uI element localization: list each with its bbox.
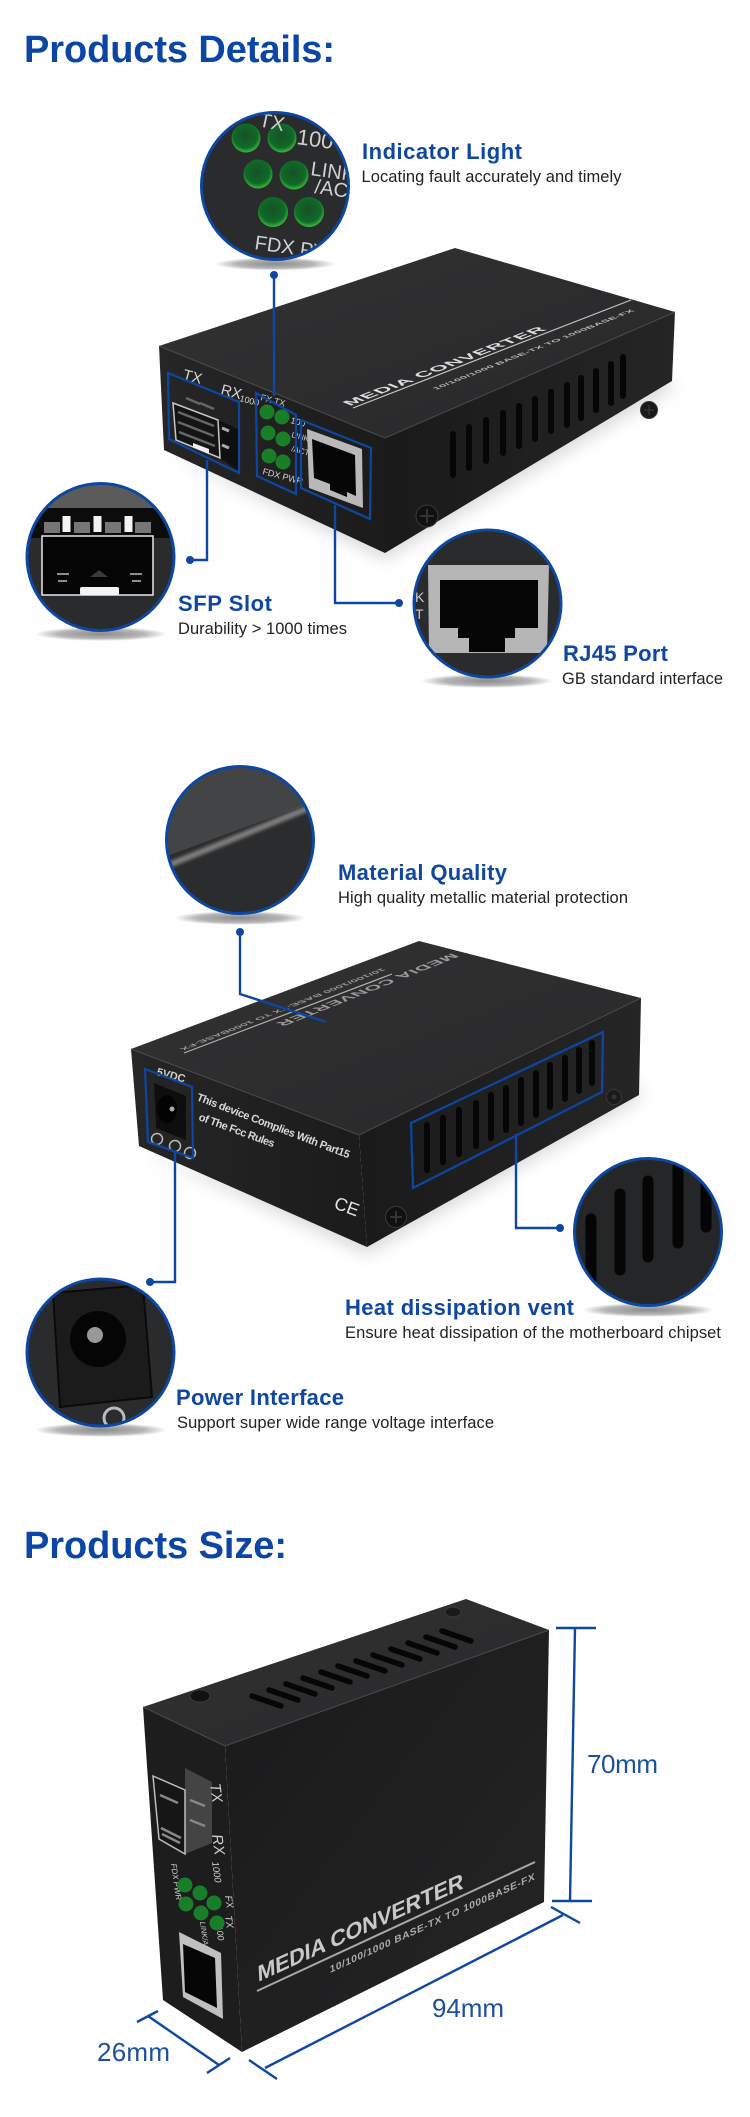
- connector: [186, 460, 207, 564]
- lens shadow: [215, 258, 335, 270]
- RJ45 port: [179, 1932, 223, 2019]
- side labels: 1000: [209, 1861, 223, 1884]
- device 2 screws: [386, 1090, 622, 1228]
- front labels: [181, 366, 311, 487]
- lens shadow: [421, 674, 553, 688]
- power jack and label: [152, 1066, 196, 1158]
- panel: top device view: [159, 248, 675, 560]
- dimension: 70mm: 70mm: [587, 1749, 658, 1779]
- side labels: LINK/ACT: [198, 1921, 212, 1957]
- device 2 product name (upside down): MEDIA CONVERTER: [272, 952, 461, 1027]
- LEDs: [260, 404, 290, 470]
- device 2 body: [131, 941, 641, 1255]
- front labels: LINK: [290, 430, 311, 444]
- dimension: 94mm: 94mm: [432, 1993, 504, 2023]
- highlight boxes: [168, 373, 371, 519]
- device 3 product name: 10/100/1000 BASE-TX TO 1000BASE-FX: [330, 1872, 535, 1976]
- front labels: 100: [289, 415, 307, 429]
- SFP port: [153, 1768, 212, 1854]
- heading: Power Interface: [176, 1385, 344, 1410]
- device 3 screws: [190, 1607, 461, 1702]
- lens shadow: [35, 627, 167, 641]
- description: Durability > 1000 times: [178, 620, 347, 638]
- front labels: FX TX: [259, 392, 287, 408]
- side labels: 100: [214, 1925, 226, 1941]
- connector: [236, 928, 326, 1022]
- device 1 product name: [338, 300, 636, 408]
- heading: RJ45 Port: [563, 641, 669, 666]
- dimension: 26mm: [97, 2011, 230, 2073]
- description: Support super wide range voltage interface: [177, 1414, 494, 1432]
- heading: Indicator Light: [362, 139, 523, 164]
- device 3 vent slots: [252, 1631, 471, 1706]
- callout: RJ45 port: [335, 505, 723, 688]
- lens: vent: [575, 1159, 721, 1305]
- SFP port: [173, 398, 240, 472]
- side labels: TX: [222, 1915, 235, 1929]
- callout: indicator light: [202, 109, 622, 396]
- heading: SFP Slot: [178, 591, 273, 616]
- lens: LEDs: [203, 114, 347, 258]
- description: GB standard interface: [562, 670, 723, 688]
- device 3 body: [143, 1599, 549, 2052]
- connector: [270, 271, 278, 396]
- compliance text: of The Fcc Rules: [197, 1112, 276, 1150]
- callout: heat dissipation vent: [345, 1134, 722, 1342]
- dimension: 94mm: [249, 1907, 580, 2079]
- device 2 product name (upside down): 10/100/1000 BASE-TX TO 1000BASE-FX: [176, 967, 387, 1051]
- device 1 product name: MEDIA CONVERTER: [338, 325, 551, 407]
- lens: LEDs: TX: [257, 109, 287, 136]
- device 3 product name: [257, 1862, 535, 1991]
- compliance text: This device Complies With Part15: [195, 1092, 351, 1161]
- device 3 product name: MEDIA CONVERTER: [257, 1868, 464, 1987]
- panel: size view: [97, 1599, 658, 2079]
- callout: material quality: [159, 760, 628, 1022]
- side labels: RX: [208, 1833, 228, 1857]
- side labels: [169, 1782, 235, 1957]
- side labels: TX: [206, 1782, 226, 1805]
- description: High quality metallic material protection: [338, 889, 628, 907]
- side labels: FX: [222, 1895, 235, 1909]
- dimension: 70mm: [552, 1628, 658, 1901]
- front labels: RX: [219, 381, 243, 403]
- lens: LEDs: LINK: [309, 158, 357, 186]
- description: Locating fault accurately and timely: [362, 168, 622, 186]
- front labels: TX: [181, 366, 204, 388]
- device 1 screws: [416, 402, 658, 527]
- panel: rear device view: [131, 941, 641, 1255]
- lens shadow: [582, 1303, 714, 1317]
- heading: Heat dissipation vent: [345, 1295, 575, 1320]
- side labels: FDX PWR: [169, 1863, 183, 1901]
- description: Ensure heat dissipation of the motherboard chipset: [345, 1324, 721, 1342]
- LEDs: [178, 1878, 224, 1930]
- connector: [335, 505, 403, 607]
- callout: power interface: [27, 1152, 494, 1437]
- device 2 product name (upside down): [176, 952, 461, 1053]
- callout: SFP slot: [27, 460, 347, 641]
- lens: LEDs: /ACT: [313, 176, 361, 204]
- title: Products Size: Products Size:: [24, 1525, 287, 1567]
- device 1 body: [159, 248, 675, 560]
- heading: Material Quality: [338, 860, 508, 885]
- power jack and label: 5VDC: [155, 1066, 187, 1086]
- front labels: FDX PWR: [261, 466, 305, 487]
- lens: LEDs: FDX PWR: [253, 232, 348, 267]
- connector: [516, 1134, 564, 1232]
- lens: RJ45: [414, 530, 560, 676]
- highlight boxes: [145, 1032, 603, 1188]
- lens: material: [168, 768, 312, 912]
- lens: SFP: [28, 483, 174, 630]
- lens: RJ45: K: [415, 589, 425, 605]
- lens: power jack: [28, 1280, 174, 1428]
- RJ45 port: [307, 429, 363, 508]
- front labels: /ACT: [290, 444, 311, 458]
- front labels: 1000: [238, 393, 260, 408]
- lens: RJ45: T: [415, 606, 424, 622]
- CE mark: CE: [332, 1193, 362, 1220]
- device 2 vent slots: [427, 1043, 592, 1170]
- lens shadow: [35, 1423, 167, 1437]
- device 1 product name: 10/100/1000 BASE-TX TO 1000BASE-FX: [431, 309, 636, 391]
- title: Products Details: Products Details:: [24, 29, 335, 71]
- lens: LEDs: 100: [295, 124, 335, 154]
- dimension: 26mm: 26mm: [97, 2037, 170, 2067]
- device 1 vent slots: [453, 357, 623, 475]
- lens shadow: [174, 911, 306, 925]
- connector: [146, 1152, 175, 1286]
